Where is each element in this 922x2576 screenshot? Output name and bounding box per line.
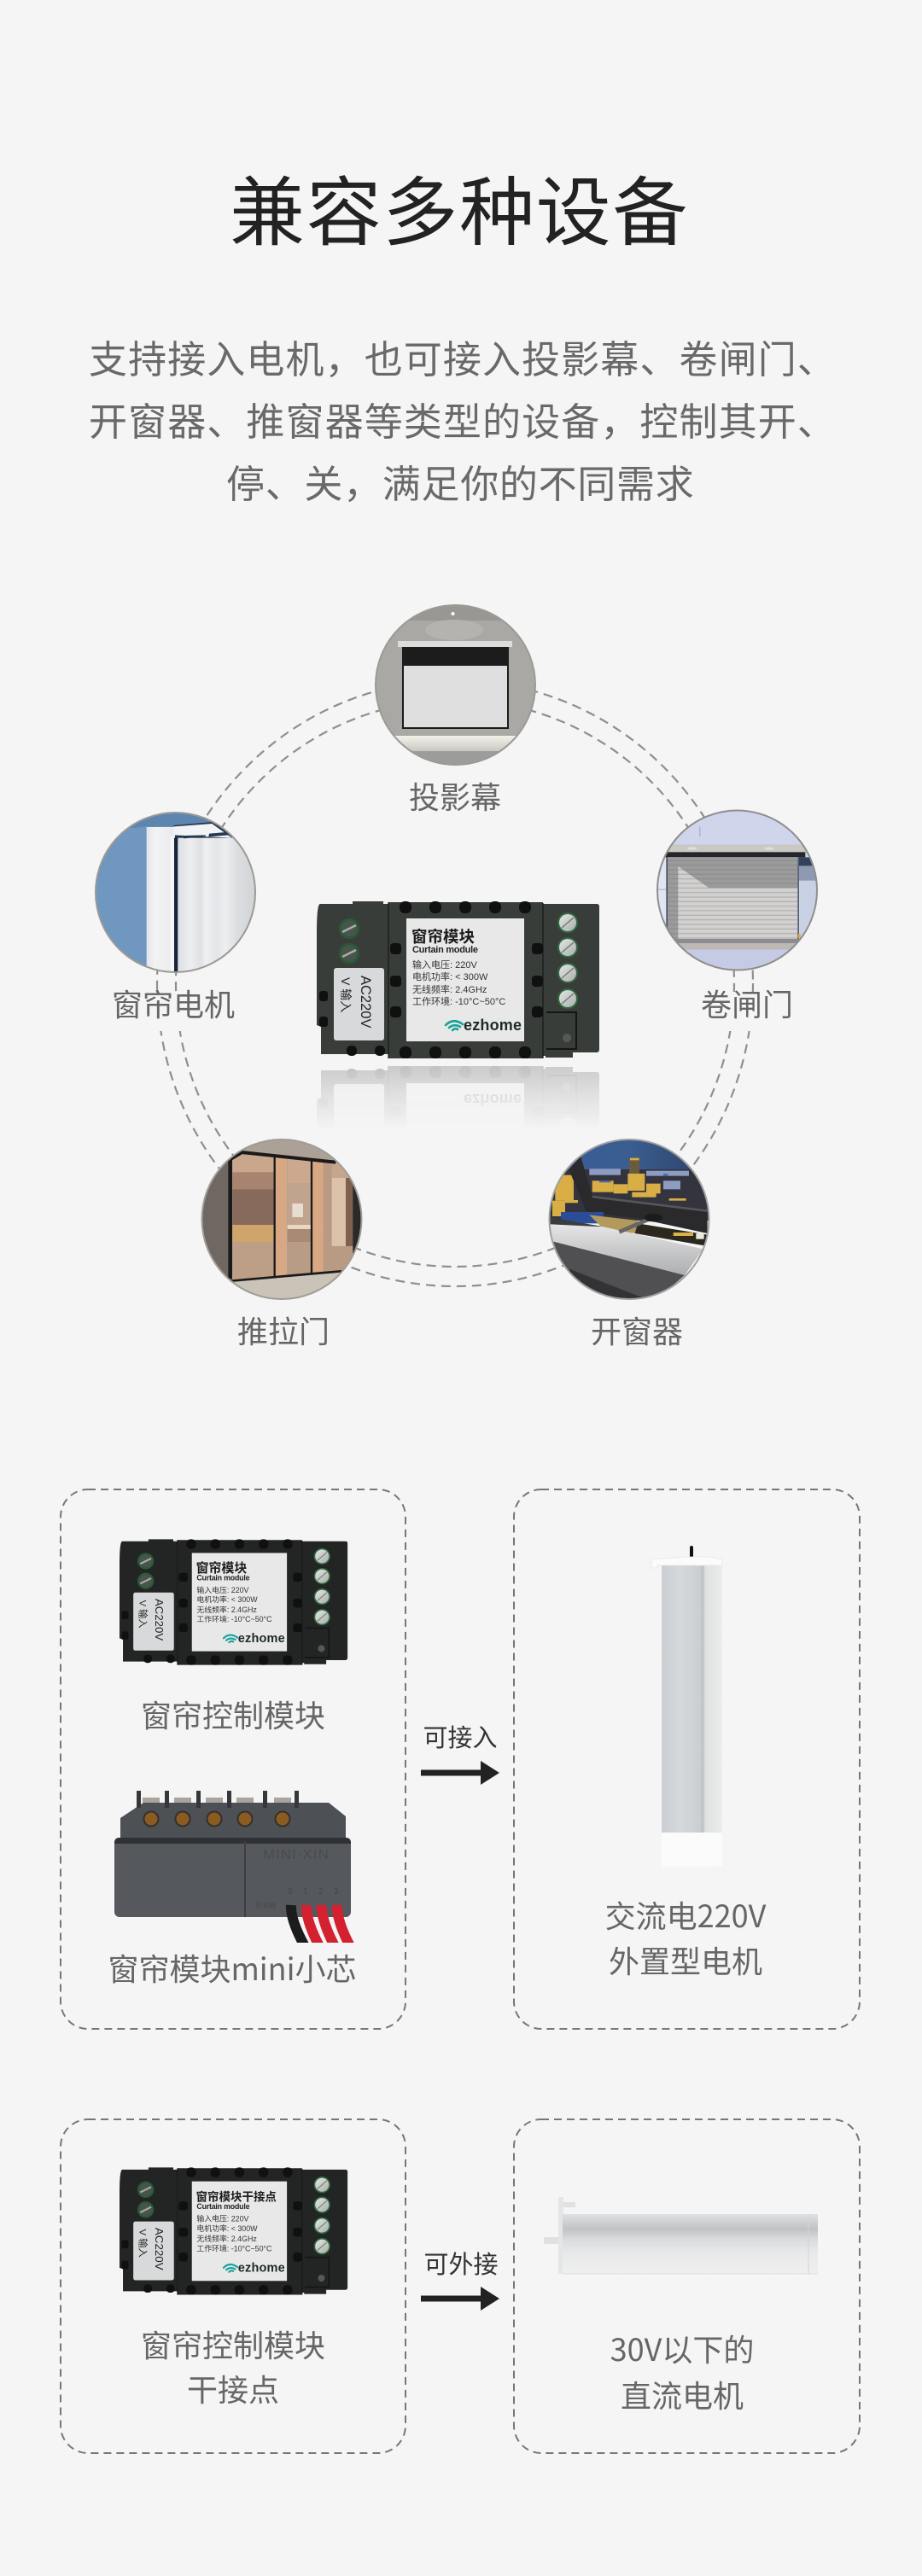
label: sliding door: 推拉门 xyxy=(237,1308,330,1352)
label: mini module: 窗帘模块mini小芯 xyxy=(108,1945,357,1990)
module: dry contact xyxy=(120,2167,347,2294)
label: dry contact module: 窗帘控制模块 xyxy=(141,2322,325,2366)
module: curtain control module: 无线频率: 2.4GHz xyxy=(196,1605,257,1614)
connector: can connect: 可接入 xyxy=(423,1724,498,1752)
panel: dry contact module xyxy=(61,2119,406,2453)
label: roller shutter: 卷闸门 xyxy=(701,981,793,1025)
module: dry contact: 窗帘模块干接点 xyxy=(196,2189,277,2203)
module: curtain control module xyxy=(120,1539,347,1665)
label: projector screen: 投影幕 xyxy=(409,773,501,818)
circle photo: sliding door xyxy=(201,1139,362,1300)
label: curtain control module: 窗帘控制模块 xyxy=(141,1692,325,1736)
panel: top left modules xyxy=(61,1489,406,2029)
circle photo: roller shutter xyxy=(656,809,818,971)
module: dry contact: ezhome xyxy=(238,2262,285,2276)
central module: AC220V xyxy=(358,976,373,1028)
circle photo: curtain motor xyxy=(95,812,256,973)
module: mini: 2 xyxy=(318,1887,324,1897)
panel: AC motor xyxy=(514,1489,860,2029)
central module: Curtain module xyxy=(412,945,478,955)
module: mini xyxy=(114,1791,351,1948)
module reflection: ezhome xyxy=(464,1091,522,1108)
module: dry contact: AC220V xyxy=(153,2228,166,2270)
module: curtain control module: 窗帘模块 xyxy=(196,1560,247,1576)
description text xyxy=(89,329,837,509)
central module: V 输入 xyxy=(339,977,353,1012)
module: dry contact: 输入电压: 220V xyxy=(196,2214,249,2223)
motor: DC xyxy=(544,2197,818,2274)
description text: 支持接入电机，也可接入投影幕、卷闸门、 xyxy=(89,329,837,384)
central module: 无线频率: 2.4GHz xyxy=(412,983,487,995)
module: dry contact: Curtain module xyxy=(196,2202,250,2211)
module: dry contact: 工作环境: -10°C~50°C xyxy=(196,2243,272,2253)
module: curtain control module: 工作环境: -10°C~50°C xyxy=(196,1614,272,1623)
circle photo: projector screen xyxy=(376,605,535,765)
module: curtain control module: Curtain module xyxy=(196,1573,250,1582)
central module xyxy=(317,901,599,1058)
module: dry contact: V 输入 xyxy=(137,2229,149,2258)
module: dry contact: 电机功率: < 300W xyxy=(196,2223,258,2233)
connector: can connect xyxy=(421,1724,499,1785)
central module: ezhome xyxy=(464,1017,522,1034)
label: dry contact module: 干接点 xyxy=(187,2366,279,2410)
title: 兼容多种设备 xyxy=(230,153,689,261)
label: AC motor: 交流电220V xyxy=(605,1892,767,1937)
central module: 窗帘模块 xyxy=(411,928,475,946)
label: window opener: 开窗器 xyxy=(591,1308,683,1352)
label: dry contact module xyxy=(141,2322,325,2410)
label: DC motor: 直流电机 xyxy=(621,2372,744,2416)
label: DC motor xyxy=(610,2326,754,2416)
connector: external xyxy=(421,2251,499,2311)
circle photo: window opener xyxy=(548,1139,710,1300)
label: AC motor: 外置型电机 xyxy=(609,1938,762,1982)
module: mini: MINI·XIN xyxy=(263,1846,330,1862)
motor: AC 220V xyxy=(651,1546,722,1867)
module: curtain control module: 输入电压: 220V xyxy=(196,1585,249,1594)
description text: 开窗器、推窗器等类型的设备，控制其开、 xyxy=(89,391,837,446)
central module: 电机功率: < 300W xyxy=(412,970,488,982)
module: curtain control module: 电机功率: < 300W xyxy=(196,1594,258,1604)
module: curtain control module: V 输入 xyxy=(137,1600,149,1629)
dashed rings xyxy=(157,680,753,1286)
label: DC motor: 30V以下的 xyxy=(610,2326,754,2370)
module reflection xyxy=(317,1066,599,1118)
module: mini: 0 xyxy=(288,1887,293,1897)
description text: 停、关，满足你的不同需求 xyxy=(226,453,694,509)
central module: 工作环境: -10°C~50°C xyxy=(412,995,505,1007)
connector: external: 可外接 xyxy=(423,2251,499,2279)
label: curtain motor: 窗帘电机 xyxy=(112,981,235,1025)
module: curtain control module: AC220V xyxy=(153,1599,166,1641)
central module: 输入电压: 220V xyxy=(412,959,477,970)
module: mini: 3 xyxy=(334,1887,339,1897)
module: dry contact: 无线频率: 2.4GHz xyxy=(196,2234,257,2243)
label: AC motor xyxy=(605,1892,767,1982)
panel: DC motor xyxy=(514,2119,860,2453)
module: mini: 1 xyxy=(303,1887,308,1897)
module: curtain control module: ezhome xyxy=(238,1632,285,1646)
module: mini: 开关线 xyxy=(255,1901,276,1909)
